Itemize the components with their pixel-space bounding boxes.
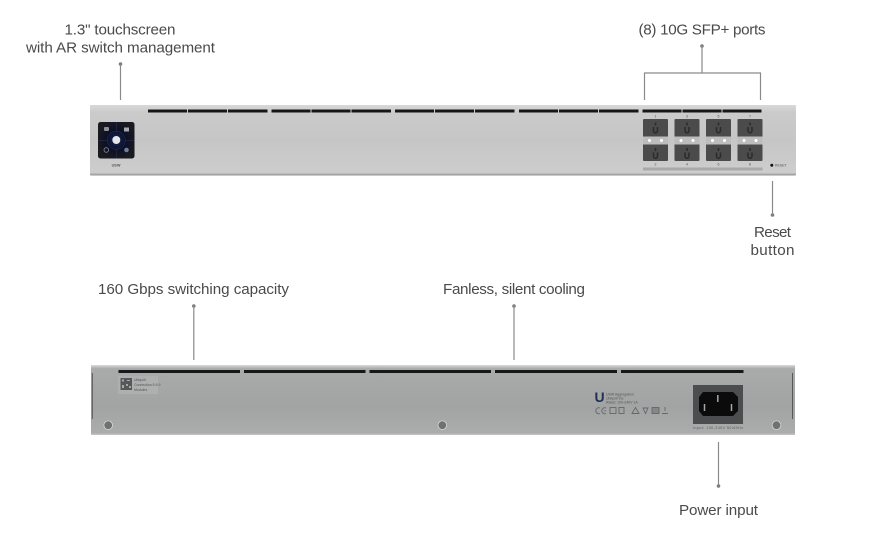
callout: reset button: button [750,242,794,259]
SFP+ port block 4 [738,119,762,161]
regulatory label with QR code: Connection 8 6 9 [134,383,161,387]
rear panel of switch [91,365,795,435]
callout: switching capacity: 160 Gbps switching capacity [98,281,289,298]
regulatory label with QR code: Ubiquiti [134,378,146,382]
callout: reset button [750,181,794,259]
port number labels: 3 [686,114,688,118]
callout: reset button: Reset [754,224,792,241]
power inlet: Input: 100-240V 50/60Hz [693,426,743,430]
port number labels [655,114,751,166]
compliance marks [596,407,668,414]
callout: SFP+ ports [638,22,766,100]
model and compliance text [606,392,638,404]
port number labels: 8 [749,162,751,166]
port number labels: 2 [655,162,657,166]
callout: fanless cooling [443,281,585,360]
model and compliance text: Rated: 100-240V 1A [606,400,638,404]
SFP+ port block 3 [706,119,731,161]
port number labels: 4 [686,162,688,166]
callout: touchscreen [25,22,216,100]
front vent slots [148,110,762,112]
SFP+ marking bar [643,168,762,170]
mounting screws [104,421,781,430]
front panel of switch [90,105,796,176]
callout: fanless cooling: Fanless, silent cooling [443,281,585,298]
SFP+ port block 1 [643,119,668,161]
callout: switching capacity [98,281,289,360]
model and compliance text: Ubiquiti Inc. [606,396,624,400]
port number labels: 5 [718,114,720,118]
callout: touchscreen: with AR switch management [25,40,216,56]
power inlet [693,385,743,430]
rear vent slots [118,370,744,373]
model and compliance text: USW Aggregation [606,392,634,396]
regulatory label with QR code: Modules [134,388,147,392]
brand mark: U [594,389,605,405]
port number labels: 6 [718,162,720,166]
USW label: USW [112,164,121,168]
callout: power input: Power input [679,502,759,519]
touchscreen display [98,122,134,158]
port number labels: 1 [655,114,657,118]
callout: power input [679,442,759,519]
reset pinhole: RESET [775,164,788,168]
side rails [92,373,793,419]
callout: touchscreen: 1.3" touchscreen [64,22,176,38]
regulatory label with QR code [118,376,161,394]
port number labels: 7 [749,114,751,118]
SFP+ port block 2 [674,119,700,161]
reset pinhole [770,164,788,168]
callout: SFP+ ports: (8) 10G SFP+ ports [638,22,766,38]
